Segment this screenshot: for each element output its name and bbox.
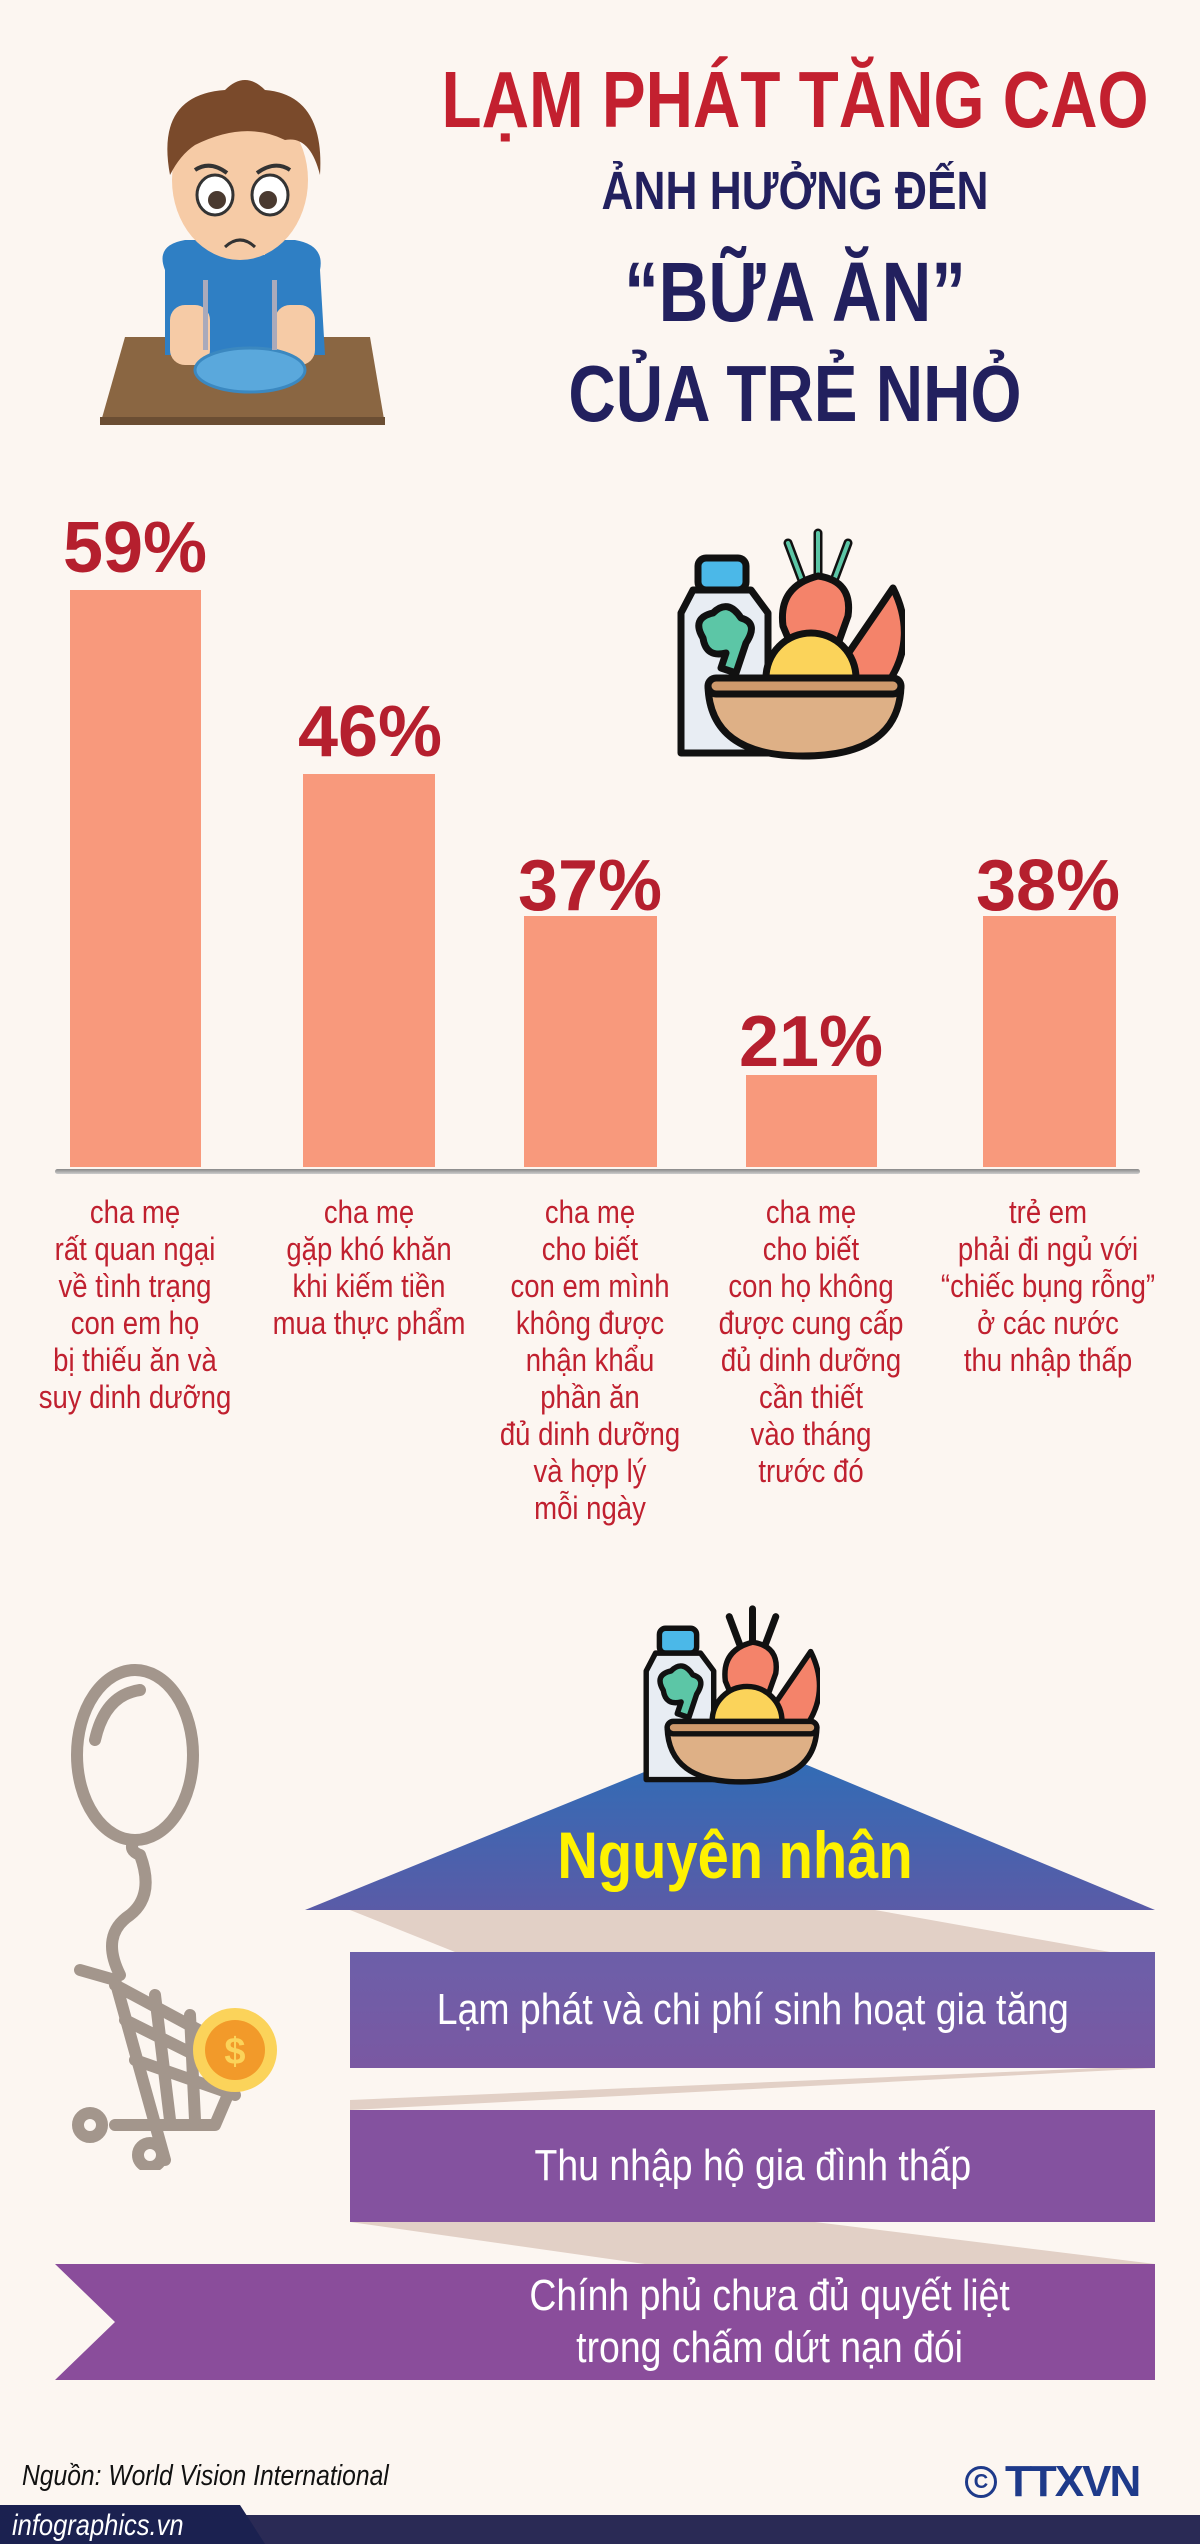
bar 46%: cha mẹ [324,1194,414,1230]
cause 3: trong chấm dứt nạn đói [577,2323,963,2372]
bar 37%: con em mình [510,1268,670,1304]
bar 38%: 38% [976,846,1120,926]
bar 21%: cần thiết [759,1379,863,1415]
bar 59%: rất quan ngại [55,1231,215,1267]
icon: balloon with shopping cart: $ [224,2031,246,2073]
bar 21%: 21% [739,1002,883,1082]
bar 21%: cho biết [763,1231,859,1267]
icon: balloon with shopping cart [71,1664,277,2170]
bar chart [39,508,1155,1526]
cause 3: Chính phủ chưa đủ quyết liệt [530,2271,1010,2320]
cause 2: Thu nhập hộ gia đình thấp [534,2141,971,2190]
logo: TTXVN: TTXVN [1005,2457,1139,2506]
bar 59%: bị thiếu ăn và [53,1342,217,1378]
bar 38%: ở các nước [977,1305,1119,1341]
illustration: sad boy at table [100,80,385,425]
bar 37%: phần ăn [540,1379,640,1415]
bar 59%: về tình trạng [59,1268,211,1304]
logo: TTXVN: C [974,2471,988,2493]
bar 21% [719,1002,903,1489]
bar 21%: trước đó [758,1453,864,1489]
cause 2 [350,2110,1155,2222]
cause 1 [350,1952,1155,2068]
bar 59%: con em họ [71,1305,199,1341]
bar 59%: suy dinh dưỡng [39,1379,231,1415]
bar 37%: và hợp lý [534,1453,646,1489]
bar 37%: mỗi ngày [534,1490,646,1526]
bar 38%: trẻ em [1009,1194,1087,1230]
bar 38%: phải đi ngủ với [958,1231,1138,1267]
triangle [305,1735,1155,1910]
bar 21%: vào tháng [751,1416,871,1452]
bar 59%: cha mẹ [90,1194,180,1230]
title line 2: ẢNH HƯỞNG ĐẾN [602,161,988,221]
icon: food basket (small) [644,1605,820,1785]
bar 59% [39,508,231,1415]
bar 38%: “chiếc bụng rỗng” [941,1268,1155,1304]
icon: food basket (top) [678,528,905,760]
bar 37%: 37% [518,846,662,926]
title line 3: “BỮA ĂN” [624,245,966,339]
bar 37%: cho biết [542,1231,638,1267]
bar 46%: khi kiếm tiền [293,1268,445,1304]
bar 38%: thu nhập thấp [964,1342,1132,1378]
bar 37%: nhận khẩu [526,1342,654,1378]
bar 46% [273,692,465,1341]
cause 1: Lạm phát và chi phí sinh hoạt gia tăng [436,1985,1069,2034]
bar 21%: được cung cấp [719,1305,903,1341]
bar 21%: cha mẹ [766,1194,856,1230]
title line 4: CỦA TRẺ NHỎ [568,349,1022,438]
footer band: infographics.vn [12,2509,184,2542]
heading: Nguyên nhân: Nguyên nhân [557,1818,913,1892]
causes diagram [55,1605,1155,2380]
bar 21%: con họ không [728,1268,894,1304]
cause 3 [55,2264,1155,2380]
bar 21%: đủ dinh dưỡng [721,1342,901,1378]
bar 46%: gặp khó khăn [286,1231,452,1267]
bar 38% [941,846,1155,1378]
footer band [0,2505,1200,2544]
title line 1: LẠM PHÁT TĂNG CAO [442,55,1148,144]
bar 46%: mua thực phẩm [273,1305,465,1341]
source: Nguồn: World Vision International [22,2460,389,2492]
bar 37%: không được [516,1305,664,1341]
bar 37%: cha mẹ [545,1194,635,1230]
bar 59%: 59% [63,508,207,588]
bar 37% [500,846,680,1526]
bar 46%: 46% [298,692,442,772]
bar 37%: đủ dinh dưỡng [500,1416,680,1452]
